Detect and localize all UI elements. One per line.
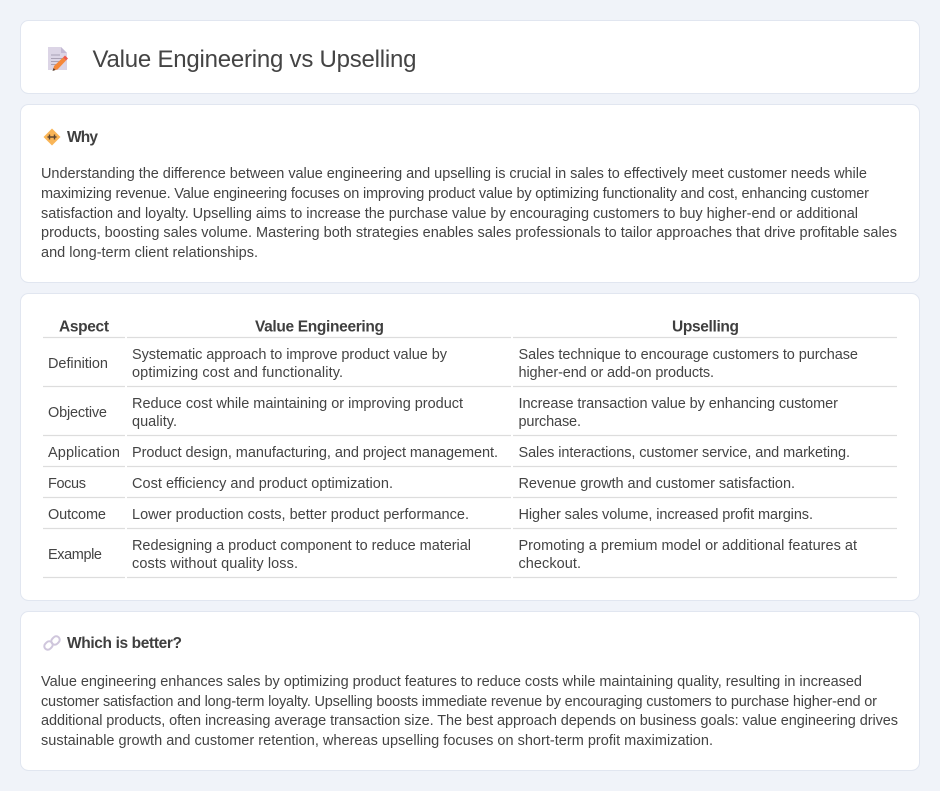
text block: why explanation: Understanding the difference between value engineering and upselling is crucial in sales to effectively meet customer needs while xyxy=(41,166,867,182)
table row: outcome: Lower production costs, better product performance. xyxy=(132,507,469,523)
text block: why explanation: satisfaction and loyalty. Upselling aims to increase the purchase value by encouraging customers to buy higher-end or additional xyxy=(41,206,858,222)
icon: diamond road sign xyxy=(44,128,60,146)
panel: which is better xyxy=(20,612,920,770)
table row: definition: Systematic approach to improve product value by xyxy=(132,347,448,363)
table row: objective xyxy=(43,396,897,436)
table row: objective: purchase. xyxy=(518,414,581,430)
text block: why explanation: and long-term client relationships. xyxy=(41,245,258,261)
table row: example: checkout. xyxy=(518,556,581,572)
icon: document with pencil xyxy=(48,47,68,71)
text block: why explanation: maximizing revenue. Value engineering focuses on improving product value by optimizing functionality and cost, enhancing customer xyxy=(41,186,869,202)
table row: example xyxy=(43,538,897,578)
table row: definition: optimizing cost and functionality. xyxy=(132,365,343,381)
table row: definition: Sales technique to encourage customers to purchase xyxy=(518,347,858,363)
table row: objective: Objective xyxy=(48,405,107,421)
panel: title header xyxy=(20,20,920,94)
text block: which is better explanation: sustainable growth and customer retention, whereas upselling focuses on short-term profit maximization. xyxy=(41,733,713,749)
heading: which is better: Which is better? xyxy=(67,635,182,652)
text block: which is better explanation: Value engineering enhances sales by optimizing product features to reduce costs while maintaining quality, resulting in increased xyxy=(41,674,862,690)
text block: why explanation xyxy=(41,166,897,261)
table row: application: Product design, manufacturing, and project management. xyxy=(132,445,498,461)
table header row xyxy=(43,318,897,338)
table header row: Upselling xyxy=(672,318,739,336)
table row: example: costs without quality loss. xyxy=(132,556,298,572)
table row: example: Example xyxy=(48,547,102,563)
table row: definition xyxy=(43,347,897,386)
table row: objective: Increase transaction value by enhancing customer xyxy=(518,396,838,412)
heading: why: Why xyxy=(67,129,98,146)
text block: which is better explanation: additional products, often increasing average transaction size. The best approach depends on business goals: value engineering drives xyxy=(41,713,898,729)
table row: example: Promoting a premium model or additional features at xyxy=(518,538,857,554)
table row: application xyxy=(43,445,897,466)
table row: outcome xyxy=(43,507,897,528)
table row: definition: higher-end or add-on products. xyxy=(518,365,714,381)
table row: example: Redesigning a product component to reduce material xyxy=(132,538,471,554)
table row: focus xyxy=(43,476,897,498)
table row: application: Sales interactions, customer service, and marketing. xyxy=(518,445,850,461)
table row: application: Application xyxy=(48,445,120,461)
table header row: Aspect xyxy=(59,318,109,336)
icon: chain link xyxy=(43,635,61,651)
panel: comparison table xyxy=(20,294,920,600)
table row: definition: Definition xyxy=(48,356,108,372)
panel: why xyxy=(20,104,920,282)
title: Value Engineering vs Upselling xyxy=(92,46,416,73)
text block: why explanation: products, boosting sales volume. Mastering both strategies enables sales professionals to tailor approaches that drive profitable sales xyxy=(41,225,897,241)
table header row: Value Engineering xyxy=(255,318,384,336)
table row: objective: quality. xyxy=(132,414,177,430)
table row: focus: Focus xyxy=(48,476,86,492)
table row: outcome: Outcome xyxy=(48,507,106,523)
table row: focus: Cost efficiency and product optimization. xyxy=(132,476,393,492)
table row: objective: Reduce cost while maintaining or improving product xyxy=(132,396,463,412)
text block: which is better explanation: customer satisfaction and long-term loyalty. Upselling boosts immediate revenue by encouraging customers to purchase higher-end or xyxy=(41,694,877,710)
table row: focus: Revenue growth and customer satisfaction. xyxy=(518,476,795,492)
text block: which is better explanation xyxy=(41,674,898,749)
table row: outcome: Higher sales volume, increased profit margins. xyxy=(518,507,813,523)
